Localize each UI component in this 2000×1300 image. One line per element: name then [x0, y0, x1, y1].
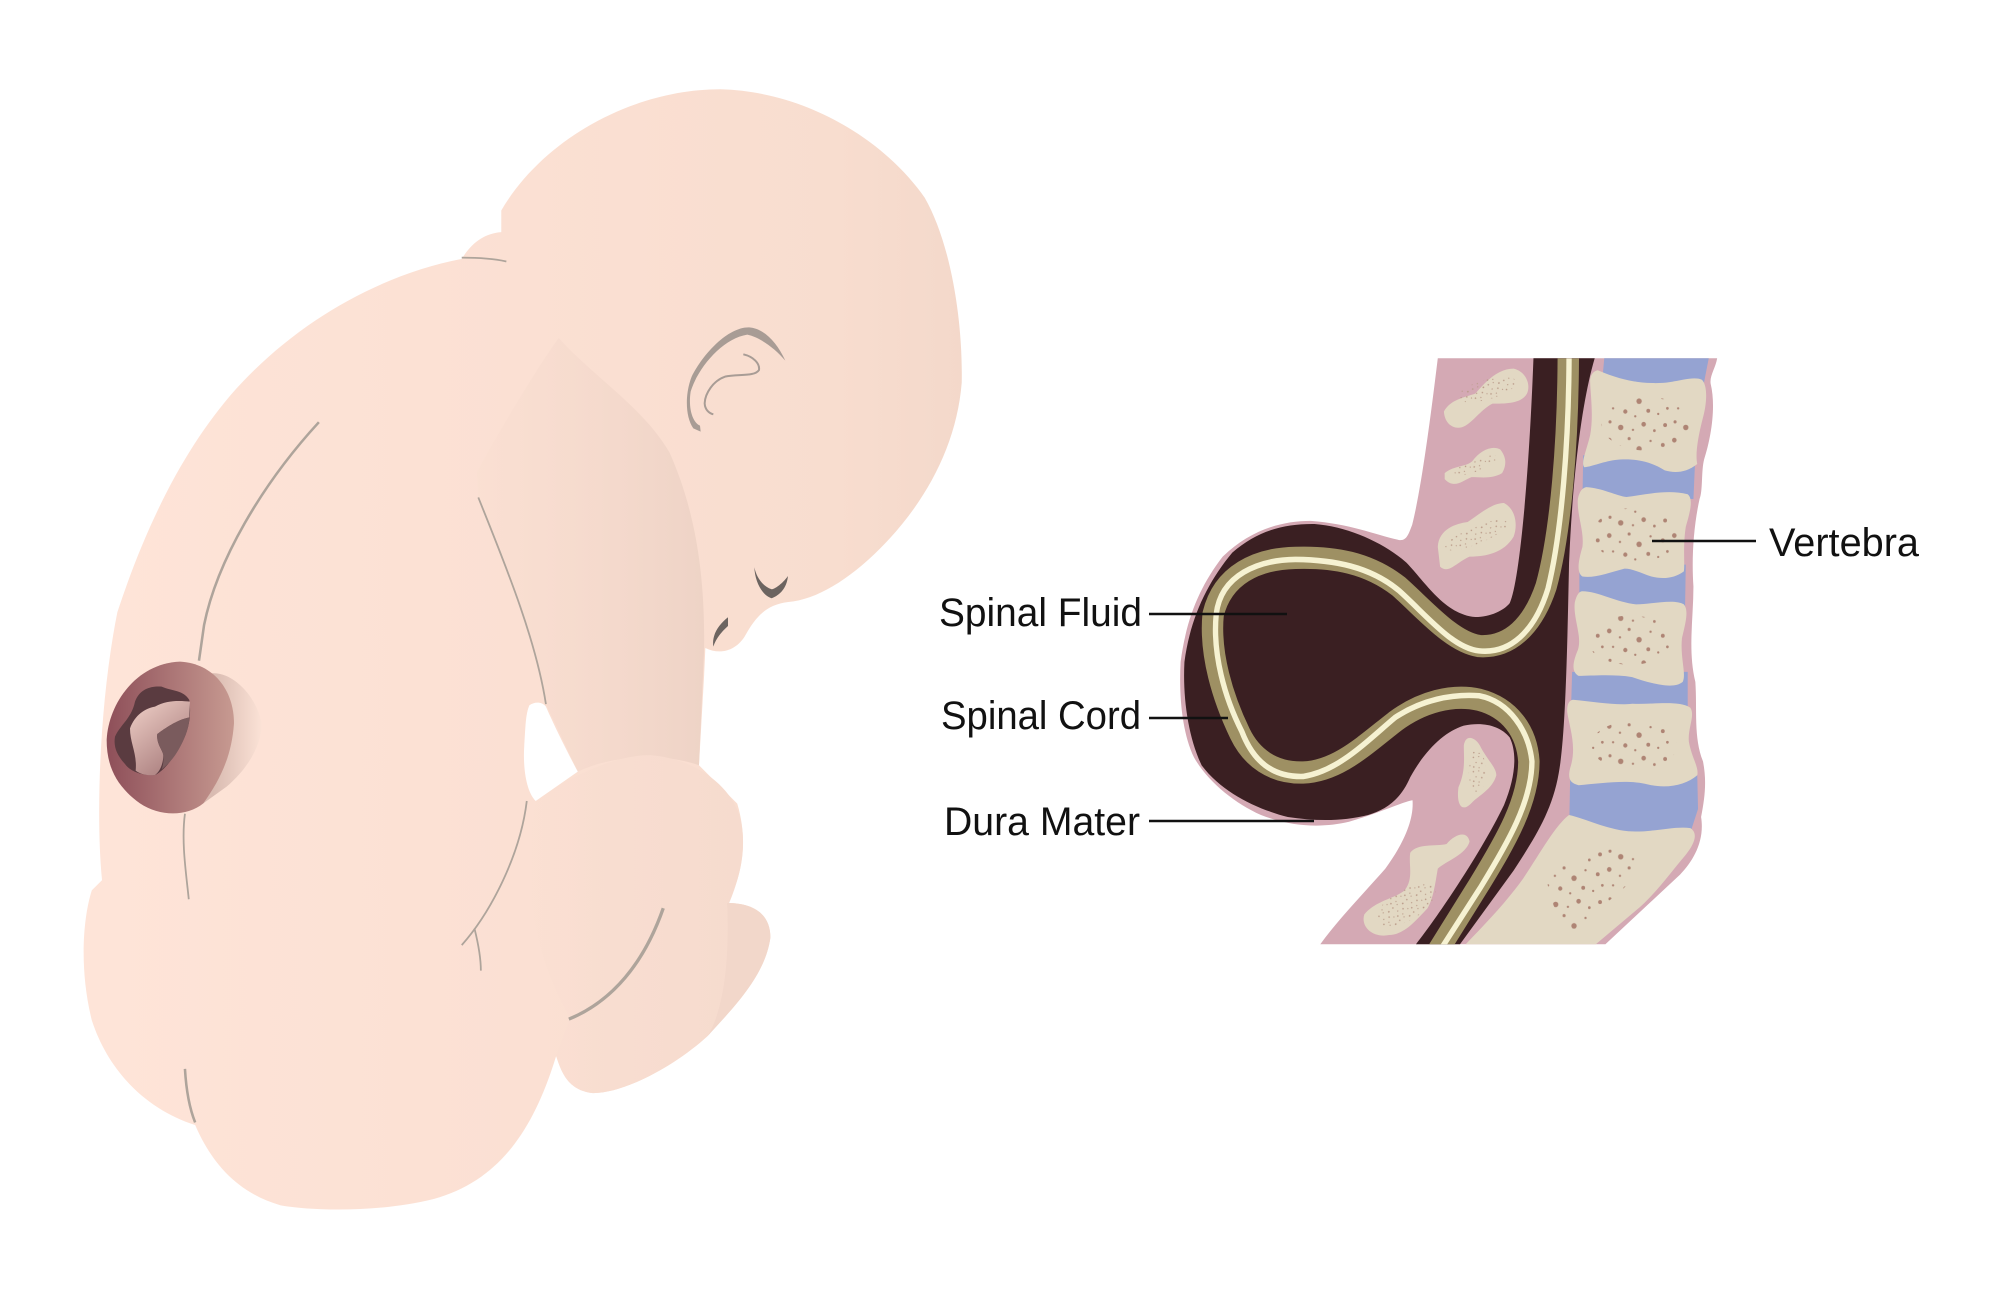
baby illustration	[84, 89, 962, 1210]
label: Dura Mater: Dura Mater	[944, 800, 1140, 844]
spine cross-section diagram	[1180, 358, 1717, 952]
body crease lines	[184, 258, 663, 1122]
bone fragments	[1364, 369, 1528, 936]
intervertebral discs	[1569, 358, 1709, 835]
arm	[477, 338, 704, 772]
closed eye and nostril	[713, 567, 788, 647]
lesion rim	[107, 662, 234, 813]
lesion exposed tissue	[130, 701, 190, 775]
vertebra 1	[1583, 370, 1706, 472]
lesion cavity	[115, 687, 190, 775]
open spinal lesion	[107, 662, 262, 813]
leg	[529, 755, 743, 1093]
vertebra 3	[1573, 591, 1686, 686]
spinal cord core	[1216, 358, 1569, 952]
label: Vertebra: Vertebra	[1769, 521, 1920, 565]
spinal cord outer band	[1212, 358, 1568, 952]
vertebrae	[1466, 370, 1706, 944]
tissue layer	[1180, 358, 1717, 944]
baby body and head	[84, 89, 962, 1210]
gap between arm and leg	[524, 703, 578, 801]
spinal fluid sac	[1184, 358, 1595, 944]
vertebra bone texture	[1546, 396, 1690, 932]
lesion protruding sac	[203, 673, 262, 803]
spinal cord	[1212, 358, 1569, 952]
foot	[708, 903, 770, 1036]
label: Spinal Cord: Spinal Cord	[941, 694, 1141, 738]
label: Spinal Fluid: Spinal Fluid	[939, 591, 1142, 635]
fragment bone texture	[1371, 372, 1519, 935]
ear	[687, 327, 785, 432]
lesion shadow	[157, 717, 189, 769]
vertebra 4	[1567, 700, 1698, 786]
vertebra 5	[1466, 815, 1695, 944]
vertebra 2	[1578, 487, 1691, 578]
leader lines	[1149, 541, 1756, 821]
